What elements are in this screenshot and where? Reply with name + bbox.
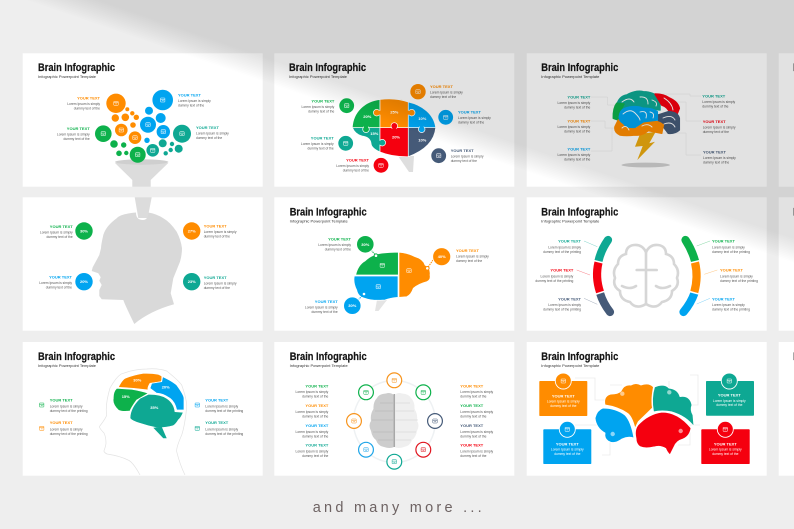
text: blue left: YOUR TEXT: [305, 423, 329, 428]
text: red card: dummy text of the: [712, 452, 739, 456]
text: teal left: [543, 239, 582, 254]
text: green left: YOUR TEXT: [305, 383, 329, 388]
text: green right: Lorem Ipsum is simply: [460, 410, 493, 414]
heading: [541, 351, 618, 368]
text: orange right: YOUR TEXT: [460, 383, 484, 388]
puzzle knob joins: [366, 113, 422, 143]
panel: partial slide row 1: [779, 53, 794, 187]
text: blue item: [205, 397, 243, 413]
percentages: [122, 378, 170, 410]
text: orange left: dummy text of the: [564, 130, 590, 134]
text: blue left: Lorem Ipsum is simply: [558, 153, 591, 157]
text: teal left: dummy text of the printing: [543, 250, 581, 254]
blue bubbles: [140, 90, 173, 143]
text: teal left: [558, 95, 591, 110]
lightning bolt: [635, 132, 656, 160]
text: blue card: Lorem Ipsum is simply: [551, 447, 584, 451]
text: red card: Lorem Ipsum is simply: [709, 447, 742, 451]
heading: Brain Infographic: [541, 206, 618, 218]
text: teal card: dummy text of the: [716, 403, 743, 407]
funnel neck: [135, 197, 152, 218]
text: teal item: dummy text of the: [196, 136, 222, 140]
text: slate left: dummy text of the printing: [543, 308, 581, 312]
text: green item: YOUR TEXT: [311, 98, 335, 103]
text: orange item: Lorem Ipsum is simply: [430, 90, 463, 94]
text: slate right: [703, 150, 736, 165]
heading: [289, 62, 366, 79]
text: green right: [460, 403, 493, 418]
text: slate item: YOUR TEXT: [451, 148, 474, 153]
text: red right: dummy text of the: [460, 454, 487, 458]
panel: head silhouette: [23, 197, 263, 331]
text: green left: Lorem Ipsum is simply: [296, 390, 329, 394]
percent circles: 20%: [80, 279, 88, 284]
text: orange right: YOUR TEXT: [720, 268, 743, 273]
text: red item: dummy text of the: [343, 169, 369, 173]
text: green item: Lorem Ipsum is simply: [50, 404, 83, 408]
text: teal left: YOUR TEXT: [305, 443, 329, 448]
text: slate right: [460, 423, 493, 438]
text: orange left: Lorem Ipsum is simply: [558, 125, 591, 129]
text: orange right: dummy text of the printing: [720, 279, 758, 283]
text: red item: Lorem Ipsum is simply: [336, 164, 369, 168]
text: orange item: Lorem Ipsum is simply: [50, 428, 83, 432]
text: orange item: YOUR TEXT: [430, 84, 453, 89]
text: green item: dummy text of the: [63, 137, 90, 141]
panel: puzzle brain: [274, 53, 514, 187]
text: green item: Lorem Ipsum is simply: [302, 105, 335, 109]
part icons: [376, 263, 411, 289]
text: teal item: YOUR TEXT: [205, 420, 229, 425]
text: slate item: dummy text of the: [451, 159, 477, 163]
panel: brain with side arcs: [527, 197, 767, 331]
footer caption: and many more ...: [313, 500, 482, 516]
text: orange item: dummy text of the printing: [50, 432, 88, 436]
panel: brain in head outline: [23, 342, 263, 476]
text: orange item: YOUR TEXT: [50, 420, 73, 425]
text: orange right: [720, 268, 758, 283]
coloured brain: [613, 91, 679, 136]
text: green item: Lorem Ipsum is simply: [318, 243, 351, 247]
text: green item: dummy text of the: [325, 248, 351, 252]
brain stem: [375, 300, 387, 311]
card: orange: [539, 373, 587, 416]
text: orange left: Lorem Ipsum is simply: [296, 410, 329, 414]
text: orange left: YOUR TEXT: [305, 403, 329, 408]
brain parts: [354, 252, 430, 300]
text: blue card: dummy text of the: [554, 452, 581, 456]
grey brain: [370, 393, 418, 448]
panel: funnel bubbles: [23, 53, 263, 187]
text: teal left: YOUR TEXT: [558, 239, 582, 244]
percent labels: 40%: [438, 254, 446, 259]
text: green item: dummy text of the printing: [50, 409, 88, 413]
text: blue item: YOUR TEXT: [205, 397, 229, 402]
text: orange left: [558, 119, 591, 134]
card: red: [701, 421, 750, 464]
text: orange card: [547, 393, 580, 408]
percentages: 20%: [162, 384, 170, 389]
text: orange card: YOUR TEXT: [552, 393, 575, 398]
text: blue item: dummy text of the: [178, 103, 204, 107]
text: blue right: dummy text of the printing: [712, 308, 750, 312]
text: orange item: [430, 84, 463, 99]
percentages: 15%: [122, 394, 130, 399]
text: red left: dummy text of the printing: [535, 279, 573, 283]
text: teal right: dummy text of the: [702, 104, 729, 108]
text: orange left: YOUR TEXT: [567, 119, 591, 124]
heading: Infographic Powerpoint Template: [541, 75, 599, 79]
text: slate left: YOUR TEXT: [558, 296, 582, 301]
text: orange item: Lorem Ipsum is simply: [456, 254, 489, 258]
text: orange item: [50, 420, 88, 436]
text: green item: YOUR TEXT: [67, 126, 90, 131]
text: blue item: dummy text of the: [311, 310, 338, 314]
leader lines: [577, 241, 717, 304]
text: green right: [712, 239, 750, 254]
heading: Brain Infographic: [38, 351, 115, 363]
text: green item: dummy text of the: [308, 109, 334, 113]
text: teal card: YOUR TEXT: [718, 392, 741, 397]
text: slate left: [543, 296, 582, 312]
text: orange card: dummy text of the: [550, 404, 577, 408]
text: orange left: dummy text of the: [302, 414, 328, 418]
percentages: 20%: [392, 134, 400, 139]
text: green right: dummy text of the printing: [712, 250, 750, 254]
text: red card: [709, 441, 742, 456]
text: teal item: dummy text of the: [307, 147, 334, 151]
text: teal item: dummy text of the: [204, 286, 230, 290]
text: orange item: dummy text of the: [74, 106, 100, 110]
text: teal item: [204, 275, 237, 290]
text: blue left: dummy text of the: [564, 158, 590, 162]
head silhouette: [92, 212, 182, 324]
text: orange card: Lorem Ipsum is simply: [547, 399, 580, 403]
text: teal right: YOUR TEXT: [702, 93, 726, 98]
heading: Infographic Powerpoint Template: [38, 364, 96, 368]
text: green item: Lorem Ipsum is simply: [40, 230, 73, 234]
text: blue item: dummy text of the printing: [205, 409, 243, 413]
panel: partial slide row 2: [779, 197, 794, 331]
percentages: 10%: [418, 138, 427, 143]
heading: [541, 62, 618, 79]
percent circles: 23%: [188, 279, 196, 284]
heading: Infographic Powerpoint Template: [289, 75, 347, 79]
text: blue card: YOUR TEXT: [556, 441, 579, 446]
percent labels: 30%: [361, 242, 370, 247]
text: blue right: [712, 296, 750, 312]
connector lines: [575, 375, 700, 455]
text: orange item: YOUR TEXT: [77, 95, 101, 100]
text: slate left: Lorem Ipsum is simply: [548, 303, 581, 307]
text: green item: [57, 126, 90, 141]
text: orange item: dummy text of the: [456, 259, 482, 263]
text: slate right: YOUR TEXT: [703, 150, 726, 155]
brain lobes: [113, 373, 184, 438]
text: blue item: YOUR TEXT: [178, 92, 201, 97]
text: teal left: Lorem Ipsum is simply: [296, 449, 329, 453]
right arc segments: [684, 240, 697, 312]
bubble icons: [101, 98, 184, 157]
text: green item: YOUR TEXT: [328, 237, 352, 242]
text: orange item: [204, 223, 237, 238]
text: blue item: Lorem Ipsum is simply: [39, 281, 72, 285]
connector lines: [591, 94, 701, 155]
text: orange item: dummy text of the: [204, 234, 230, 238]
text: blue item: Lorem Ipsum is simply: [305, 306, 338, 310]
percent labels: 30%: [348, 303, 357, 308]
panel: brain with lightning: [527, 53, 767, 187]
coloured brain lobes: [595, 384, 694, 455]
text: blue right: YOUR TEXT: [712, 296, 735, 301]
text: orange item: YOUR TEXT: [204, 223, 227, 228]
text: blue card: [551, 441, 584, 456]
text: green right: YOUR TEXT: [460, 403, 484, 408]
text: blue left: dummy text of the: [302, 434, 328, 438]
percentages: 35%: [150, 405, 159, 410]
text: blue item: [39, 275, 73, 290]
text: blue item: [305, 299, 338, 314]
text: green right: Lorem Ipsum is simply: [712, 245, 745, 249]
card: blue: [543, 421, 591, 464]
text: green item: [318, 237, 352, 252]
text: teal card: Lorem Ipsum is simply: [713, 399, 746, 403]
text: orange item: Lorem Ipsum is simply: [204, 230, 237, 234]
panel: brain with icon ring: [274, 342, 514, 476]
left arc segments: [597, 240, 610, 312]
text: teal right: Lorem Ipsum is simply: [702, 100, 735, 104]
text: green right: dummy text of the: [460, 414, 487, 418]
ring: [353, 380, 435, 462]
text: red right: dummy text of the: [703, 130, 729, 134]
text: green item: YOUR TEXT: [50, 397, 73, 402]
percentages: 20%: [363, 114, 372, 119]
text: red item: YOUR TEXT: [346, 158, 370, 163]
heading: [541, 206, 618, 224]
text: teal left: Lorem Ipsum is simply: [548, 245, 581, 249]
text: blue item: [178, 92, 211, 107]
panel: brain with cards: [527, 342, 767, 476]
text: blue item: [458, 109, 491, 124]
text: blue left: YOUR TEXT: [567, 147, 591, 152]
connector dashes: [358, 250, 433, 300]
text: slate right: Lorem Ipsum is simply: [460, 430, 493, 434]
text: red left: [535, 268, 574, 283]
funnel: [115, 159, 168, 187]
text: green right: YOUR TEXT: [712, 239, 735, 244]
floor shadow: [621, 163, 670, 167]
text: teal item: YOUR TEXT: [204, 275, 227, 280]
orange bubbles: [106, 94, 141, 144]
text: blue left: Lorem Ipsum is simply: [296, 430, 329, 434]
text: red left: Lorem Ipsum is simply: [541, 274, 574, 278]
text: orange item: [456, 248, 489, 263]
text: red right: YOUR TEXT: [703, 119, 726, 124]
text: blue item: YOUR TEXT: [458, 109, 481, 114]
heading: Infographic Powerpoint Template: [290, 220, 348, 224]
text: blue item: Lorem Ipsum is simply: [205, 404, 238, 408]
list icons: [40, 403, 200, 430]
percentages: 25%: [390, 109, 399, 114]
card: teal: [706, 373, 754, 416]
text: teal right: [702, 93, 735, 108]
text: teal left: dummy text of the: [302, 454, 328, 458]
text: teal left: Lorem Ipsum is simply: [558, 101, 591, 105]
icon circles: [338, 84, 453, 173]
heading: [38, 62, 115, 79]
heading: Infographic Powerpoint Template: [290, 364, 348, 368]
text: teal item: Lorem Ipsum is simply: [204, 282, 237, 286]
text: green left: [296, 383, 329, 399]
text: teal left: YOUR TEXT: [567, 95, 591, 100]
text: slate item: [451, 148, 484, 163]
lobe dots: [610, 390, 683, 436]
text: red right: YOUR TEXT: [460, 443, 484, 448]
text: green item: [40, 224, 73, 239]
text: teal item: YOUR TEXT: [196, 125, 219, 130]
heading: [38, 351, 115, 368]
percentages: [363, 109, 427, 143]
percent circles: [75, 222, 200, 290]
percent circles: 30%: [80, 228, 88, 234]
text: blue item: Lorem Ipsum is simply: [178, 99, 211, 103]
heading: Infographic Powerpoint Template: [541, 220, 599, 224]
text: teal item: [196, 125, 229, 140]
text: blue item: YOUR TEXT: [315, 299, 338, 304]
heading: [290, 351, 367, 368]
text: green item: [50, 397, 88, 413]
panel: three-part brain: [274, 197, 514, 331]
green bubbles: [95, 125, 146, 163]
panel: partial slide row 3: [779, 342, 794, 476]
text: orange item: YOUR TEXT: [456, 248, 479, 253]
brain folds: [622, 97, 675, 130]
text: teal item: YOUR TEXT: [311, 136, 334, 141]
text: orange right: [460, 383, 493, 399]
text: red card: YOUR TEXT: [714, 441, 737, 446]
text: green left: dummy text of the: [302, 395, 328, 399]
text: orange right: Lorem Ipsum is simply: [460, 390, 493, 394]
text: orange right: dummy text of the: [460, 395, 487, 399]
text: red right: [460, 443, 493, 458]
text: teal item: [301, 136, 334, 151]
percentages: 10%: [418, 116, 427, 121]
heading: Infographic Powerpoint Template: [38, 75, 96, 79]
heading: Brain Infographic: [290, 351, 367, 363]
text: slate right: YOUR TEXT: [460, 423, 484, 428]
heading: Brain Infographic: [541, 351, 618, 363]
brain stem: [398, 156, 414, 172]
text: blue right: Lorem Ipsum is simply: [712, 303, 745, 307]
percentages: 30%: [133, 378, 142, 383]
text: teal left: dummy text of the: [564, 106, 590, 110]
text: teal item: Lorem Ipsum is simply: [301, 142, 334, 146]
text: green item: Lorem Ipsum is simply: [57, 132, 90, 136]
text: teal item: Lorem Ipsum is simply: [205, 428, 238, 432]
text: blue left: [296, 423, 329, 438]
percent circles: 27%: [188, 228, 196, 234]
heading: Brain Infographic: [38, 62, 115, 74]
text: green item: [302, 98, 335, 113]
text: orange right: Lorem Ipsum is simply: [720, 274, 753, 278]
text: blue left: [558, 147, 591, 162]
text: slate right: Lorem Ipsum is simply: [703, 156, 736, 160]
head outline: [99, 369, 187, 475]
text: green item: dummy text of the: [46, 235, 73, 239]
text: slate item: Lorem Ipsum is simply: [451, 154, 484, 158]
heading: Brain Infographic: [289, 62, 366, 74]
text: orange left: [296, 403, 329, 418]
puzzle brain: [352, 99, 436, 157]
text: blue item: Lorem Ipsum is simply: [458, 116, 491, 120]
text: slate right: dummy text of the: [703, 161, 729, 165]
text: orange item: [67, 95, 101, 110]
text: teal left: [296, 443, 329, 458]
text: blue item: YOUR TEXT: [49, 275, 73, 280]
percent labels: [348, 242, 446, 308]
text: orange item: Lorem Ipsum is simply: [67, 102, 100, 106]
brain outline: [614, 245, 678, 307]
icon rings: [347, 373, 442, 469]
text: red right: Lorem Ipsum is simply: [703, 125, 736, 129]
text: orange item: dummy text of the: [430, 95, 456, 99]
text: teal item: [205, 420, 243, 436]
teal bubbles: [146, 125, 191, 157]
heading: Brain Infographic: [541, 62, 618, 74]
heading: Infographic Powerpoint Template: [541, 364, 599, 368]
text: red item: [336, 158, 370, 173]
heading: Brain Infographic: [290, 206, 367, 218]
percentages: 15%: [370, 131, 379, 136]
text: blue item: dummy text of the: [46, 286, 72, 290]
text: red right: [703, 119, 736, 134]
text: teal card: [713, 392, 746, 407]
percent circles: [344, 236, 451, 314]
text: blue item: dummy text of the: [458, 120, 484, 124]
text: slate right: dummy text of the: [460, 434, 487, 438]
text: red right: Lorem Ipsum is simply: [460, 449, 493, 453]
text: teal item: Lorem Ipsum is simply: [196, 131, 229, 135]
text: green item: YOUR TEXT: [50, 224, 73, 229]
ring icons: [352, 378, 437, 464]
text: teal item: dummy text of the printing: [205, 432, 243, 436]
text: red left: YOUR TEXT: [550, 268, 574, 273]
heading: [290, 206, 367, 224]
